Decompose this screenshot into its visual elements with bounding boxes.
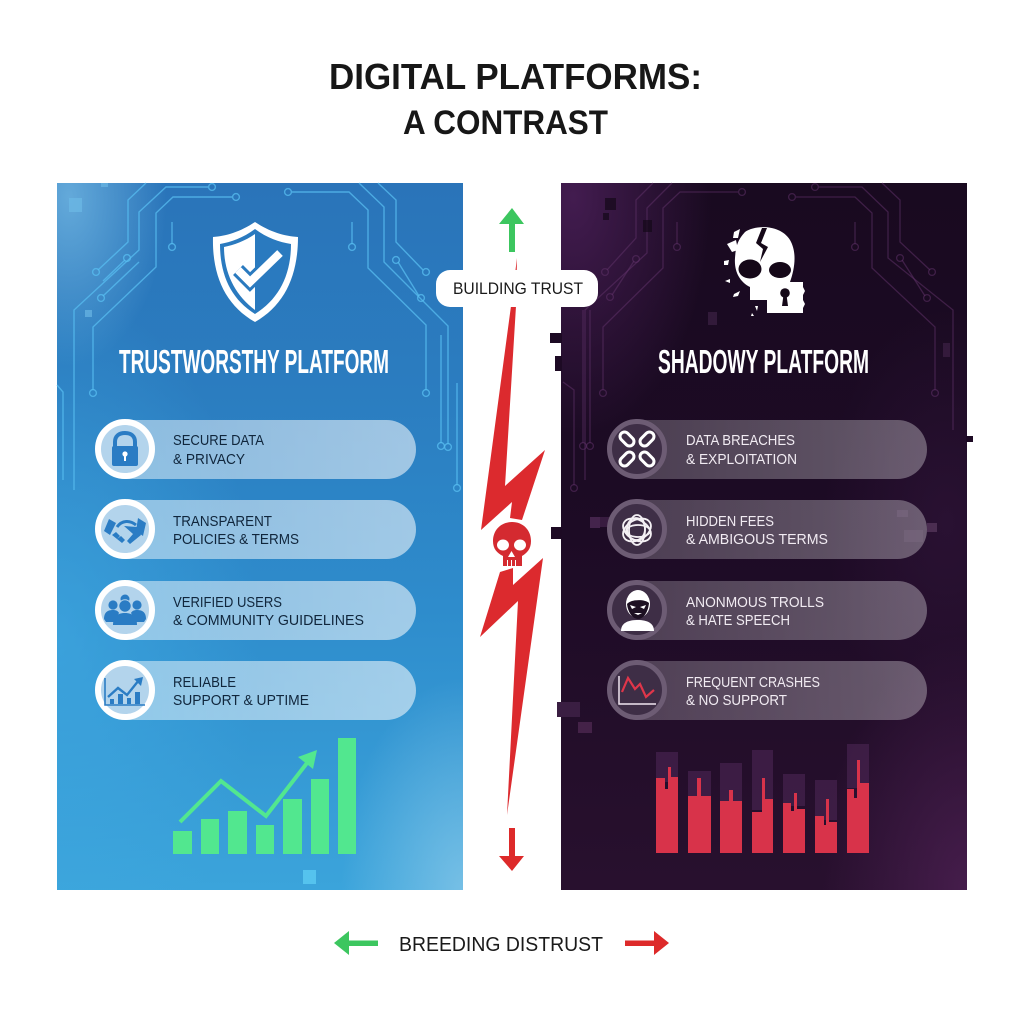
chart: rising green bars	[173, 738, 356, 854]
icon: handshake	[104, 518, 146, 544]
label text	[686, 513, 828, 548]
list item: transparent policies	[96, 500, 416, 559]
icon: broken chain links	[618, 430, 656, 468]
title: DIGITAL PLATFORMS:	[329, 56, 702, 97]
arrow: green left	[334, 931, 378, 955]
label: building trust: BUILDING TRUST	[453, 279, 583, 298]
label text	[686, 594, 824, 629]
icon: tangled knot	[619, 514, 655, 546]
list item: reliable support	[96, 661, 416, 720]
label text: & PRIVACY	[173, 451, 245, 468]
arrow: red down	[499, 828, 524, 871]
label text: & HATE SPEECH	[686, 612, 790, 629]
label text	[173, 432, 264, 468]
icon: shield with check	[213, 222, 298, 322]
label text: RELIABLE	[173, 674, 236, 691]
list item: anonymous trolls	[608, 581, 927, 640]
label text: TRANSPARENT	[173, 513, 272, 530]
icon: red skull	[493, 522, 531, 566]
icon: growth chart	[105, 677, 145, 705]
label text: SUPPORT & UPTIME	[173, 692, 309, 709]
label: building trust	[436, 270, 598, 307]
label text: & COMMUNITY GUIDELINES	[173, 612, 364, 629]
label text: SECURE DATA	[173, 432, 264, 449]
panel: shadowy platform	[550, 183, 973, 890]
label text: POLICIES & TERMS	[173, 531, 299, 548]
label text	[173, 513, 299, 548]
label text: & EXPLOITATION	[686, 451, 797, 468]
label text: DATA BREACHES	[686, 432, 795, 449]
icon: cracked skull with padlock	[724, 227, 805, 316]
list item: hidden fees	[608, 500, 927, 559]
label text	[686, 432, 797, 468]
list item: data breaches	[608, 420, 927, 479]
title: A CONTRAST	[403, 104, 608, 142]
icon: lower lightning bolt	[480, 558, 543, 815]
label text: & AMBIGOUS TERMS	[686, 531, 828, 548]
list item: secure data and privacy	[96, 420, 416, 479]
label text	[686, 674, 820, 709]
title	[329, 56, 702, 142]
list item: frequent crashes	[608, 661, 927, 720]
label text: HIDDEN FEES	[686, 513, 774, 530]
label text: ANONMOUS TROLLS	[686, 594, 824, 611]
arrow: red right	[625, 931, 669, 955]
icon: falling line chart	[619, 676, 656, 704]
icon: upper lightning bolt	[481, 258, 545, 530]
chart: unstable red bars	[656, 744, 869, 853]
icon: group of users	[104, 594, 146, 625]
legend: breeding distrust	[334, 931, 669, 956]
icon: padlock	[112, 433, 138, 466]
arrow: green up	[499, 208, 524, 252]
label text: FREQUENT CRASHES	[686, 674, 820, 691]
heading: shadowy platform: SHADOWY PLATFORM	[658, 343, 869, 380]
label text: & NO SUPPORT	[686, 692, 787, 709]
label text	[173, 674, 309, 709]
label text: VERIFIED USERS	[173, 594, 282, 611]
list item: verified users	[96, 581, 416, 640]
legend: breeding distrust: BREEDING DISTRUST	[399, 934, 603, 956]
icon: masked troll	[621, 590, 654, 631]
label text	[173, 594, 364, 629]
heading: trustworthy platform: TRUSTWORSTHY PLATFORM	[119, 343, 389, 380]
panel: trustworthy platform	[57, 183, 463, 890]
